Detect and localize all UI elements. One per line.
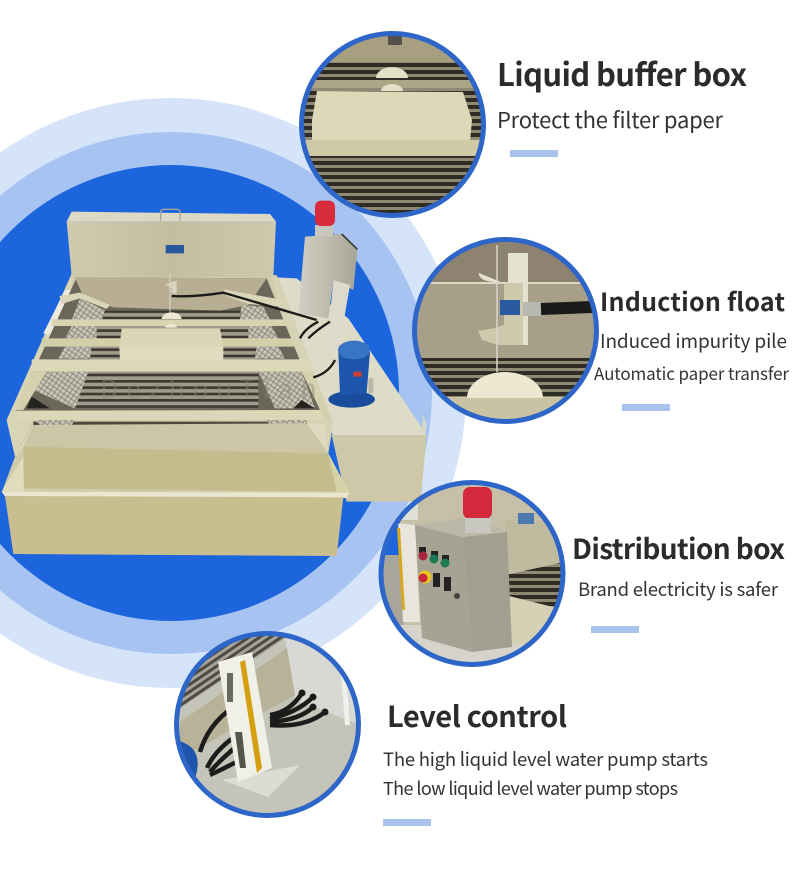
description: Brand electricity is safer <box>578 576 779 602</box>
description: Protect the filter paper <box>497 103 723 135</box>
feature: induction float <box>594 283 789 411</box>
accent bar <box>383 819 431 826</box>
circle: distribution box detail <box>378 480 565 667</box>
heading: Level control <box>387 694 567 736</box>
small buffer box <box>119 328 223 360</box>
cross bars <box>15 289 333 423</box>
heading: Induction float <box>600 283 785 319</box>
heading: Liquid buffer box <box>497 50 747 95</box>
control box and beacon <box>298 201 357 318</box>
circle: level control detail <box>174 631 361 818</box>
top box <box>67 209 276 277</box>
circle: induction float detail <box>412 237 599 424</box>
circle: liquid buffer box detail <box>299 31 486 218</box>
description line 2: The low liquid level water pump stops <box>383 775 678 801</box>
mesh belts <box>33 298 315 427</box>
accent bar <box>591 626 639 633</box>
accent bar <box>510 150 558 157</box>
float assembly <box>162 273 182 328</box>
main machine: paper band filter <box>2 201 427 556</box>
background concentric circles <box>0 98 466 688</box>
feature: distribution box <box>572 528 785 633</box>
filter paper <box>75 277 267 311</box>
right tank <box>277 277 427 502</box>
level bracket <box>328 280 350 360</box>
feature: level control <box>383 694 708 826</box>
description line 1: Induced impurity pile <box>600 327 787 354</box>
heading: Distribution box <box>572 528 785 568</box>
accent bar <box>622 404 670 411</box>
chute and tray <box>2 423 349 556</box>
feature: liquid buffer box <box>497 50 747 157</box>
blue motor pump <box>328 341 375 408</box>
cables <box>172 293 335 377</box>
filter body <box>7 277 333 457</box>
machine silhouette <box>2 273 349 494</box>
watermark: DezhouTian <box>100 367 317 406</box>
description line 1: The high liquid level water pump starts <box>383 746 708 772</box>
description line 2: Automatic paper transfer <box>594 360 789 385</box>
